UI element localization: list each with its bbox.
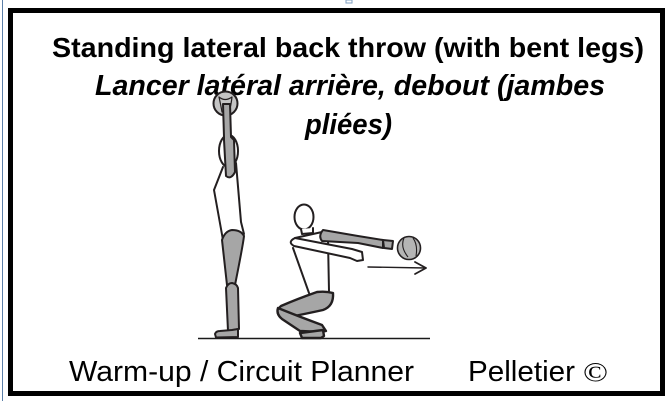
figure: standing athlete holding ball overhead [214, 92, 244, 338]
thigh [278, 292, 333, 318]
title: French [95, 70, 605, 141]
footer: author: Pelletier [468, 356, 575, 388]
torso [214, 163, 244, 240]
neck [301, 228, 313, 234]
torso [293, 240, 329, 293]
thigh [222, 230, 244, 285]
icon: thrown ball [398, 236, 420, 260]
back arm [291, 238, 363, 261]
shin [278, 308, 326, 332]
title: English: Standing lateral back throw (with bent legs) [52, 32, 644, 63]
footer: planner name: Warm-up / Circuit Planner [69, 356, 414, 388]
front arm and hand [320, 230, 383, 248]
shin [226, 283, 239, 331]
head [294, 204, 314, 230]
title: French: pliées) [304, 109, 392, 141]
foot [215, 329, 238, 338]
arrow: throw direction [368, 262, 426, 274]
icon: ball overhead [214, 92, 238, 116]
foot [300, 330, 324, 338]
head [219, 135, 238, 167]
raised arm [223, 104, 235, 177]
figure: squatting athlete [278, 204, 393, 338]
footer: copyright symbol: © [583, 357, 608, 387]
title: French: Lancer latéral arrière, debout (jambes [95, 70, 605, 102]
ground line [198, 338, 430, 340]
